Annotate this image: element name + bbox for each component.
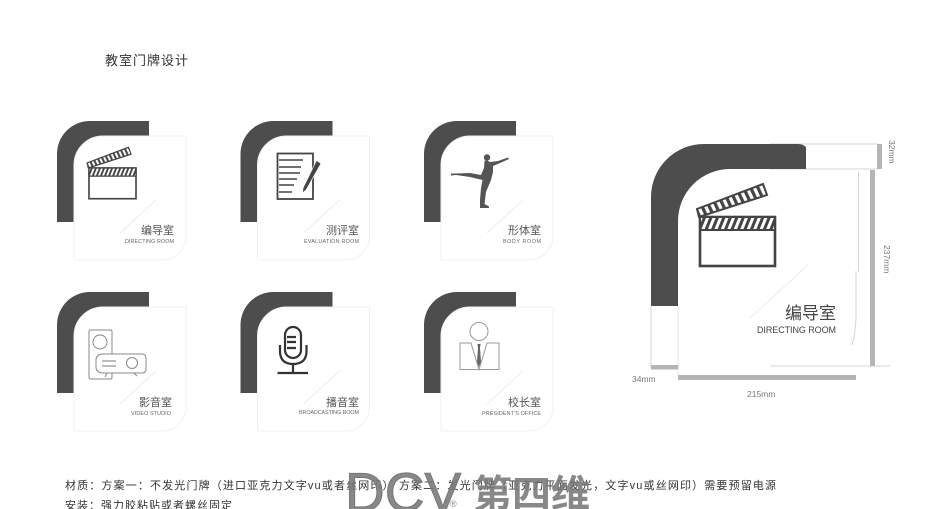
card outline [258,307,370,431]
room name: 播音室 [326,395,359,409]
panel: dimension drawing [632,140,897,399]
icon: speaker and projector [89,330,146,379]
icon: dancer [451,154,509,208]
diagonal line [487,371,523,404]
dark band [424,121,516,222]
diagonal line [120,200,156,233]
right side edge of sign [770,172,890,366]
panel: evaluation room sign [240,121,370,260]
room name: 编导室 [141,223,174,237]
icon: person in suit [460,322,499,370]
card outline [441,136,553,260]
dark band [240,292,332,393]
diagonal line [304,200,340,233]
room name: 编导室 [785,304,836,323]
icon: clapperboard [697,184,775,266]
diagonal line [304,371,340,404]
dark band [424,292,516,393]
card outline [74,307,186,431]
dimension: 237mm: 237mm [882,245,892,273]
card outline [74,136,186,260]
room name: 校长室 [508,395,541,409]
room name english: VIDEO STUDIO [131,411,171,417]
dark band [651,144,806,306]
dark band [57,292,149,393]
room name english: EVALUATION ROOM [304,239,360,245]
material description: 材质：方案一：不发光门牌（进口亚克力文字vu或者丝网印） 方案二：发光门牌（亚克力平面发光，文字vu或丝网印）需要预留电源 [65,478,776,492]
dimension: 32mm: 32mm [887,140,897,164]
icon: document and pen [278,154,321,199]
room name english: BROADCASTING ROOM [299,410,360,416]
room name: 形体室 [508,223,541,237]
panel: video studio sign [57,292,186,431]
watermark logo [345,461,590,509]
title: 教室门牌设计 [105,53,188,68]
card outline [441,307,553,431]
room name english: PRESIDENT'S OFFICE [482,411,541,417]
dimension bars [651,144,882,380]
diagonal line [750,265,808,318]
dimension: 34mm: 34mm [632,374,656,384]
diagonal line [120,371,156,404]
diagonal line [487,200,523,233]
icon: microphone [278,327,308,373]
dimension: 215mm: 215mm [747,389,775,399]
icon: clapperboard [87,147,136,199]
card outline [258,136,370,260]
room name: 测评室 [326,223,359,237]
room name english: DIRECTING ROOM [125,239,174,245]
panel: broadcasting room sign [240,292,370,431]
room name english: DIRECTING ROOM [757,325,836,335]
panel: president's office sign [424,292,553,431]
watermark logo: ® [450,499,457,509]
room name english: BODY ROOM [503,239,542,245]
dark band [240,121,332,222]
panel: body room sign [424,121,553,260]
room name: 影音室 [139,395,172,409]
left edge of sign [677,306,679,375]
white extension outlines [651,144,878,366]
panel: directing room sign [57,121,186,260]
dark band [57,121,149,222]
